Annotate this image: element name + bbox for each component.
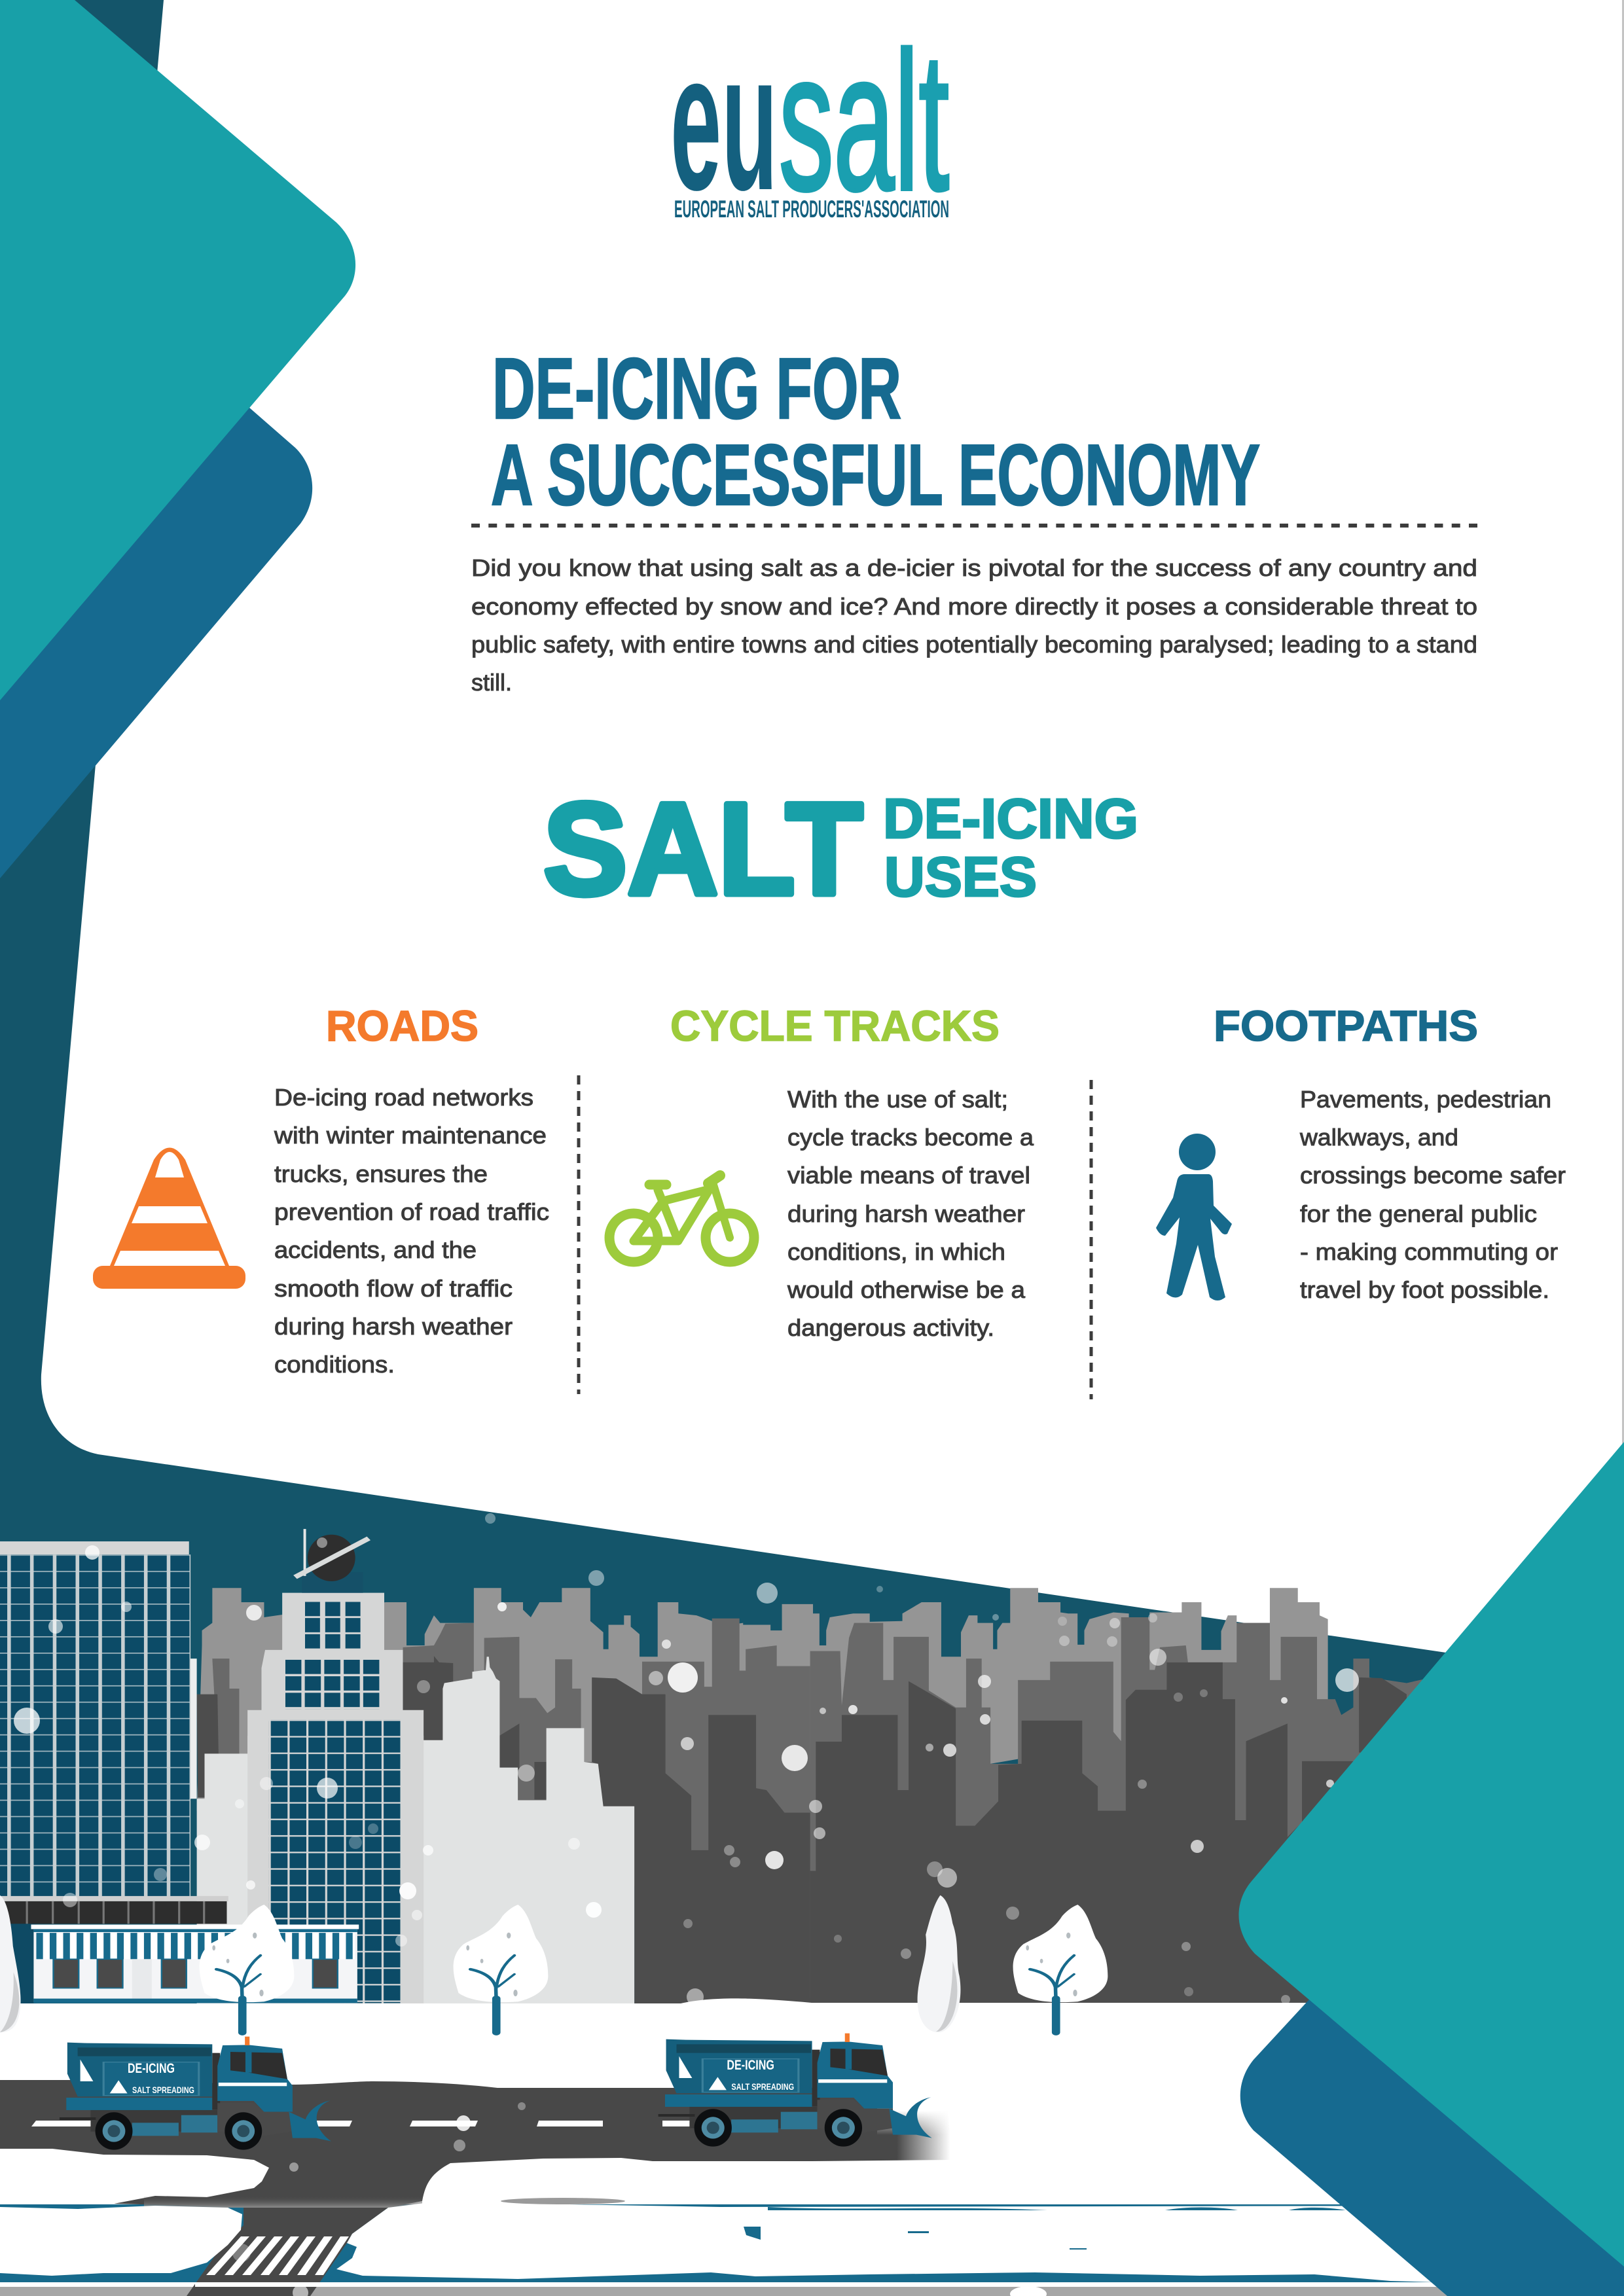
text: footpaths description: Pavements, pedestrian: [1300, 1086, 1551, 1113]
near buildings, pale grey: [197, 1657, 634, 2006]
falling snow flakes: [14, 1513, 1359, 2005]
hopper: [67, 2043, 212, 2096]
back buildings, light grey: [810, 1588, 1328, 1764]
decorative shape: bottom-right blue: [1240, 2000, 1624, 2296]
section heading: salt de-icing uses: DE-ICING: [883, 788, 1138, 850]
chassis: [689, 2107, 818, 2128]
panel: cycle tracks: [609, 1001, 1034, 1341]
text: roads description: accidents, and the: [274, 1236, 477, 1263]
icon: walking person: [1156, 1134, 1232, 1300]
logo tagline: EUROPEAN SALT PRODUCERS'ASSOCIATION: [674, 196, 949, 223]
tree: centre snowy tree: [454, 1905, 548, 2032]
bed: [66, 2098, 212, 2110]
pavement and gutter band under the snow: [0, 2204, 1506, 2282]
city skyline scene: [0, 1529, 1423, 2007]
pedestrian crossing: [195, 2236, 349, 2287]
divider: cycle tracks / footpaths: [1089, 1080, 1093, 1399]
plough: [889, 2097, 932, 2138]
text: footpaths description: [1299, 1086, 1566, 1303]
truck label: de-icing: DE-ICING: [727, 2058, 774, 2073]
bottom grey road strip: [0, 2287, 1506, 2296]
title: [491, 340, 1260, 523]
logo: eusalt: eu: [670, 11, 778, 231]
skyline: right half: [810, 1588, 1423, 2006]
text: roads description: prevention of road traffic: [274, 1198, 549, 1225]
text: cycle tracks description: during harsh weather: [787, 1200, 1025, 1227]
section heading: salt de-icing uses: SALT: [543, 776, 863, 922]
glass office tower: [0, 1541, 228, 2007]
intro paragraph: economy effected by snow and ice? And more directly it poses a considerable threat to: [471, 593, 1477, 620]
decorative shape: bottom-right teal: [1238, 1442, 1624, 2267]
text: cycle tracks description: viable means of travel: [787, 1162, 1030, 1189]
back buildings, light grey: [197, 1588, 813, 1811]
front buildings, dark grey: [403, 1656, 453, 1740]
panel: roads: [93, 1001, 549, 1378]
truck: left de-icing truck: [60, 2037, 331, 2150]
tower spire with globe: [295, 1529, 369, 1593]
dome: [1158, 1649, 1187, 1662]
far right dark tower: [1359, 1677, 1407, 1753]
snow bank: right large: [336, 2202, 1506, 2284]
bed: [665, 2094, 812, 2107]
text: cycle tracks description: [787, 1086, 1034, 1341]
text: footpaths description: walkways, and: [1299, 1124, 1458, 1151]
text: roads description: trucks, ensures the: [274, 1160, 488, 1187]
text: cycle tracks description: conditions, in which: [787, 1238, 1005, 1265]
road junction shading: [144, 2196, 422, 2208]
text: footpaths description: - making commuting or: [1300, 1238, 1558, 1265]
text: roads description: conditions.: [274, 1351, 395, 1378]
snow flakes over the road: [232, 2102, 1047, 2296]
truck: right de-icing truck: [659, 2034, 932, 2147]
wheels: [695, 2109, 732, 2147]
title: DE-ICING FOR: [492, 340, 901, 437]
text: cycle tracks description: With the use of salt;: [787, 1086, 1008, 1113]
text: roads description: De-icing road networks: [274, 1084, 533, 1111]
middle buildings, mid grey: [403, 1619, 813, 1886]
cab: [812, 2050, 820, 2106]
heading: cycle tracks: CYCLE TRACKS: [670, 1001, 1000, 1050]
kerb line: [0, 2282, 1506, 2287]
snow covered ground: [0, 1998, 1624, 2296]
icon: bicycle: [609, 1175, 754, 1262]
text: roads description: with winter maintenance: [274, 1122, 547, 1149]
section heading: salt de-icing uses: USES: [884, 846, 1037, 908]
chassis: [90, 2110, 217, 2132]
wheels: [96, 2112, 132, 2150]
blue slivers showing through the snow: [744, 2207, 1346, 2250]
text: roads description: [274, 1084, 549, 1378]
cab: [212, 2053, 220, 2109]
text: roads description: during harsh weather: [274, 1313, 513, 1340]
hopper: [666, 2039, 812, 2093]
plough: [289, 2100, 331, 2142]
heading: roads: ROADS: [326, 1001, 478, 1050]
dashed rule under the title: [471, 524, 1477, 528]
white road centre dashes: [31, 2121, 700, 2126]
front buildings, dark grey: [810, 1662, 1423, 2006]
snow bank: left lower: [0, 2206, 242, 2276]
left mid-grey block: [212, 1659, 239, 1754]
decorative shape: top-left blue: [0, 407, 312, 878]
shop front with striped awnings: [31, 1925, 359, 2003]
snow fade in front of the right truck: [877, 2085, 959, 2137]
road with side street: [0, 2080, 952, 2296]
text: cycle tracks description: cycle tracks become a: [787, 1124, 1034, 1151]
panel: footpaths: [1156, 1001, 1566, 1303]
skyline: left half: [0, 1529, 813, 2007]
text: cycle tracks description: dangerous activity.: [787, 1314, 994, 1341]
icon: traffic cone: [93, 1148, 245, 1289]
truck label: salt spreading: SALT SPREADING: [132, 2085, 194, 2095]
tree: left snowy tree: [200, 1905, 294, 2032]
title: A SUCCESSFUL ECONOMY: [491, 427, 1260, 523]
section heading: salt de-icing uses: [543, 776, 1138, 922]
truck label: salt spreading: SALT SPREADING: [731, 2081, 794, 2092]
text: footpaths description: for the general public: [1300, 1200, 1537, 1227]
heading: footpaths: FOOTPATHS: [1214, 1001, 1478, 1050]
intro paragraph: public safety, with entire towns and cities potentially becoming paralysed; leading to a stand: [471, 631, 1477, 658]
tree: left cypress covered in snow: [0, 1895, 21, 2032]
middle buildings, mid grey: [810, 1617, 1423, 1999]
art deco tower: [247, 1593, 424, 2006]
intro paragraph: Did you know that using salt as a de-icier is pivotal for the success of any country and: [471, 554, 1477, 581]
text: footpaths description: travel by foot possible.: [1300, 1276, 1549, 1303]
text: roads description: smooth flow of traffic: [274, 1275, 513, 1302]
left dark block: [197, 1695, 219, 1798]
page edge line: [1622, 0, 1624, 1446]
divider: roads / cycle tracks: [577, 1075, 580, 1394]
logo word: salt: salt: [779, 11, 950, 231]
text: footpaths description: crossings become safer: [1300, 1162, 1566, 1189]
tree: right snowy tree: [1013, 1905, 1108, 2032]
text: cycle tracks description: would otherwise be a: [787, 1276, 1026, 1303]
tree: right cypress covered in snow: [918, 1895, 960, 2032]
decorative shape: top-left teal: [0, 0, 355, 700]
grey smudge at the top of the snow bank: [501, 2198, 625, 2204]
intro paragraph: [471, 554, 1477, 696]
intro paragraph: still.: [471, 669, 512, 696]
truck label: de-icing: DE-ICING: [128, 2061, 175, 2076]
